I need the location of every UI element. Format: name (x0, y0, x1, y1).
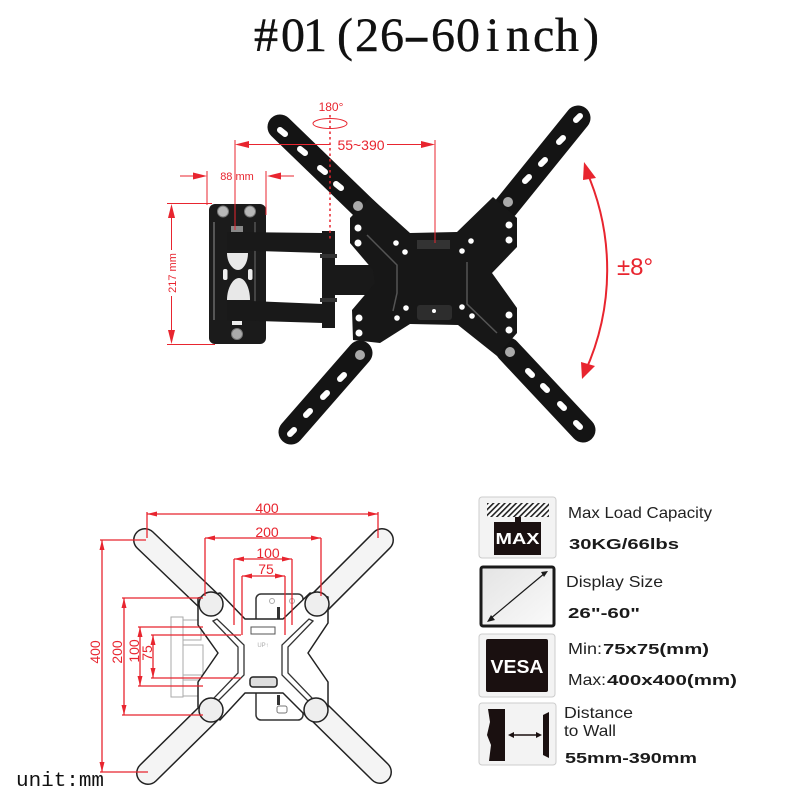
dimensions: vertical VESA heights (100, 540, 241, 772)
line drawing: mount back view (145, 540, 382, 773)
arm slots and bolts (280, 116, 580, 434)
spec: max load (479, 497, 712, 558)
dimension: 88 mm: 88 mm (220, 171, 254, 183)
icon: display diagonal (481, 567, 554, 626)
horizontal dimension labels: 200 (255, 524, 279, 540)
vertical dimension labels: 200 (109, 640, 125, 664)
spec: max load: 30KG/66lbs (569, 536, 679, 553)
dimension: 217 mm: 217 mm (167, 253, 179, 293)
spec: display size: 26"-60" (568, 605, 640, 622)
spec: display size (481, 567, 663, 626)
icon: VESA: VESA (490, 657, 544, 677)
dimension: 180 degree rotation (313, 100, 347, 240)
dimensions: horizontal VESA widths (147, 512, 378, 635)
spec: VESA: Min: (568, 641, 602, 658)
dimension: 55~390 (235, 137, 435, 243)
spec: VESA: 75x75(mm) (603, 641, 709, 658)
wall plate outline (256, 594, 303, 720)
swing arms (227, 231, 375, 328)
spec: display size: Display Size (566, 574, 663, 591)
plate outline (198, 592, 329, 722)
vertical dimension labels: 400 (87, 640, 103, 664)
icon: max load: MAX (496, 531, 540, 548)
dimension: 55~390: 55~390 (337, 137, 385, 153)
horizontal dimension labels: 400 (255, 500, 279, 516)
photo: TV wall mount (209, 116, 583, 434)
swing arm outline (171, 617, 203, 697)
dimension: tilt angle arc (581, 162, 653, 379)
title: - (403, 9, 430, 62)
spec: max load: Max Load Capacity (568, 505, 712, 522)
dimension: 217 mm (167, 204, 215, 344)
title: 60inch) (431, 9, 599, 62)
spec: VESA: Max: (568, 672, 606, 689)
horizontal dimension labels: 100 (256, 545, 280, 561)
spec: VESA: 400x400(mm) (607, 672, 737, 689)
unit label: unit:mm (16, 770, 104, 793)
spec: distance to wall: Distance (564, 705, 633, 722)
spec: distance to wall (479, 703, 697, 767)
plate outline: UP↑ (257, 643, 269, 649)
dimension: 180 degree rotation: 180° (319, 100, 344, 114)
horizontal dimension labels (255, 500, 280, 577)
spec: distance to wall: 55mm-390mm (565, 750, 697, 767)
adjustable arms with slots (280, 118, 583, 432)
icon: distance to wall (479, 703, 556, 765)
icon: VESA (479, 634, 555, 697)
wall plate (209, 204, 266, 344)
X arms outline (145, 540, 382, 773)
dimension: 88 mm (180, 171, 294, 215)
icon: max load (479, 497, 556, 558)
spec: distance to wall: to Wall (564, 723, 616, 740)
title: #01(26 (254, 9, 404, 62)
horizontal dimension labels: 75 (258, 561, 274, 577)
vertical dimension labels: 100 (126, 639, 142, 663)
dimension: tilt angle arc: ±8° (617, 254, 653, 281)
vertical dimension labels (87, 639, 155, 664)
spec: VESA (479, 634, 737, 697)
VESA plate (350, 197, 517, 356)
vertical dimension labels: 75 (139, 645, 155, 661)
title (254, 9, 599, 62)
